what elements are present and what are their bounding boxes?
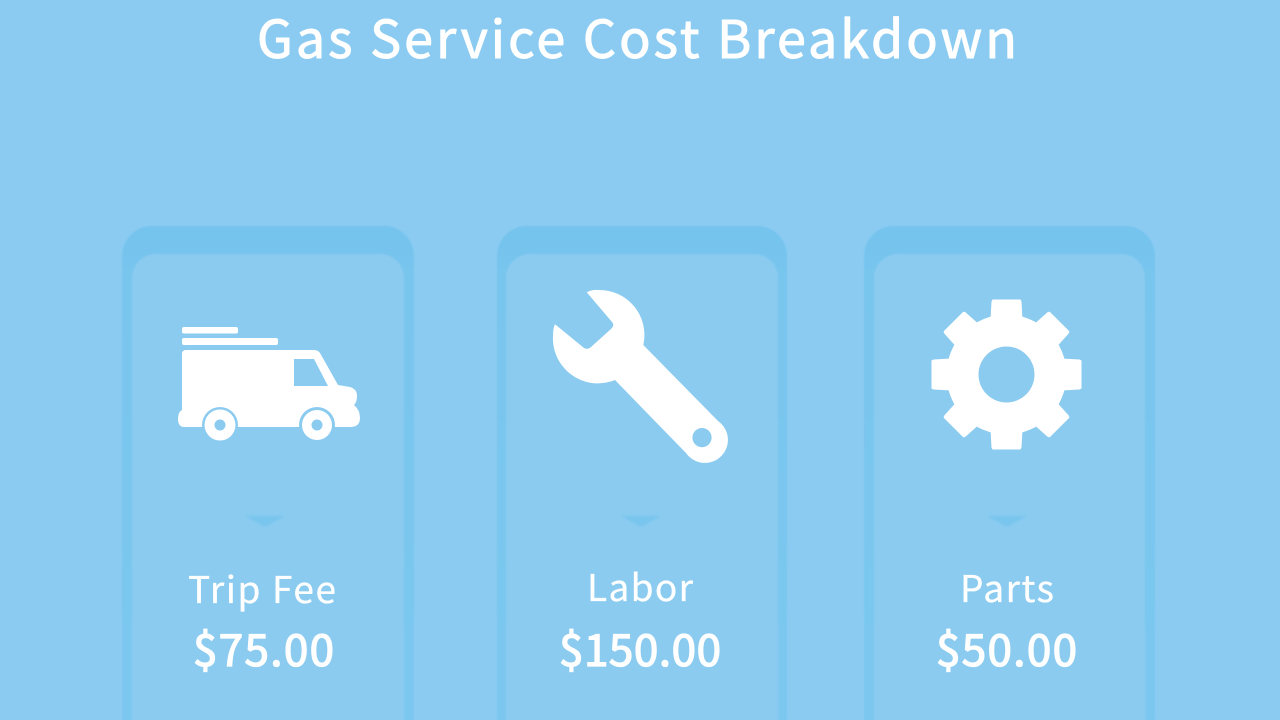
icon: van bbox=[178, 327, 360, 443]
card frame: trip fee bbox=[122, 226, 414, 720]
panel: trip fee bbox=[122, 226, 414, 720]
card frame: parts bbox=[864, 226, 1155, 720]
card face: trip fee bbox=[132, 254, 404, 720]
label: labor: Labor bbox=[587, 558, 694, 612]
card face: parts bbox=[874, 254, 1145, 720]
label: trip fee: Trip Fee bbox=[188, 560, 336, 614]
card frame: labor bbox=[497, 226, 787, 720]
panel: labor bbox=[497, 226, 787, 720]
arrow: trip fee bbox=[245, 516, 285, 527]
arrow: labor bbox=[621, 516, 661, 527]
arrow: parts bbox=[987, 516, 1027, 527]
icon: gear bbox=[932, 300, 1082, 450]
title: Gas Service Cost Breakdown bbox=[257, 0, 1017, 73]
label: parts: Parts bbox=[960, 559, 1054, 613]
card face: labor bbox=[506, 254, 778, 720]
value: trip fee: $75.00 bbox=[193, 615, 334, 679]
icon: wrench bbox=[553, 290, 728, 463]
panel: parts bbox=[864, 226, 1155, 720]
value: parts: $50.00 bbox=[936, 615, 1077, 679]
value: labor: $150.00 bbox=[559, 615, 721, 679]
